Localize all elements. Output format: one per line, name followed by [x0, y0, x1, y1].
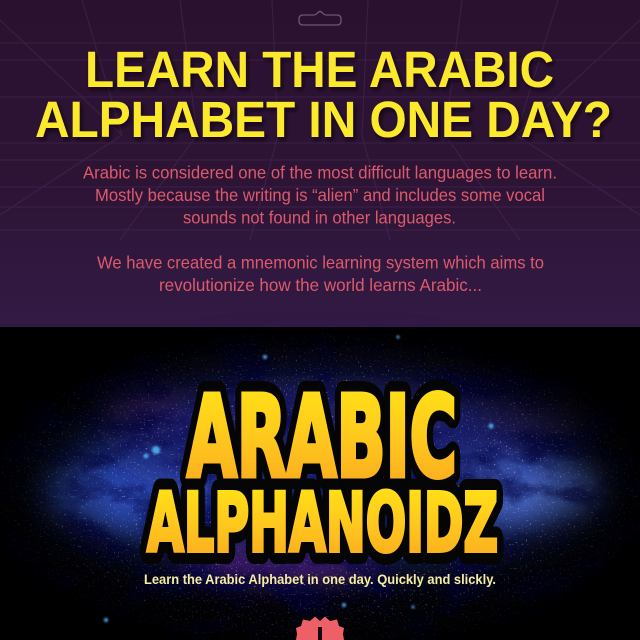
- panel: galaxy banner: [0, 327, 640, 640]
- logo: Arabic Alphanoidz: [147, 373, 498, 571]
- tagline: Learn the Arabic Alphabet in one day. Quickly and slickly.: [144, 572, 496, 587]
- icon: hanger slot: [299, 12, 341, 25]
- intro text: difficulty: Mostly because the writing is “alien” and includes some vocal: [95, 185, 545, 205]
- intro text: difficulty: sounds not found in other languages.: [183, 208, 456, 228]
- icon: numbered badge: [296, 616, 344, 640]
- title: ALPHABET IN ONE DAY?: [35, 91, 612, 148]
- intro text: difficulty: [83, 162, 557, 228]
- intro text: mnemonic system: [97, 252, 544, 295]
- panel: intro: [0, 0, 640, 327]
- title: [35, 41, 612, 148]
- intro text: mnemonic system: revolutionize how the world learns Arabic...: [159, 275, 482, 295]
- intro text: mnemonic system: We have created a mnemonic learning system which aims to: [97, 252, 544, 272]
- intro text: difficulty: Arabic is considered one of the most difficult languages to learn.: [83, 162, 557, 182]
- nebula background: [0, 327, 640, 640]
- title: LEARN THE ARABIC: [85, 41, 554, 98]
